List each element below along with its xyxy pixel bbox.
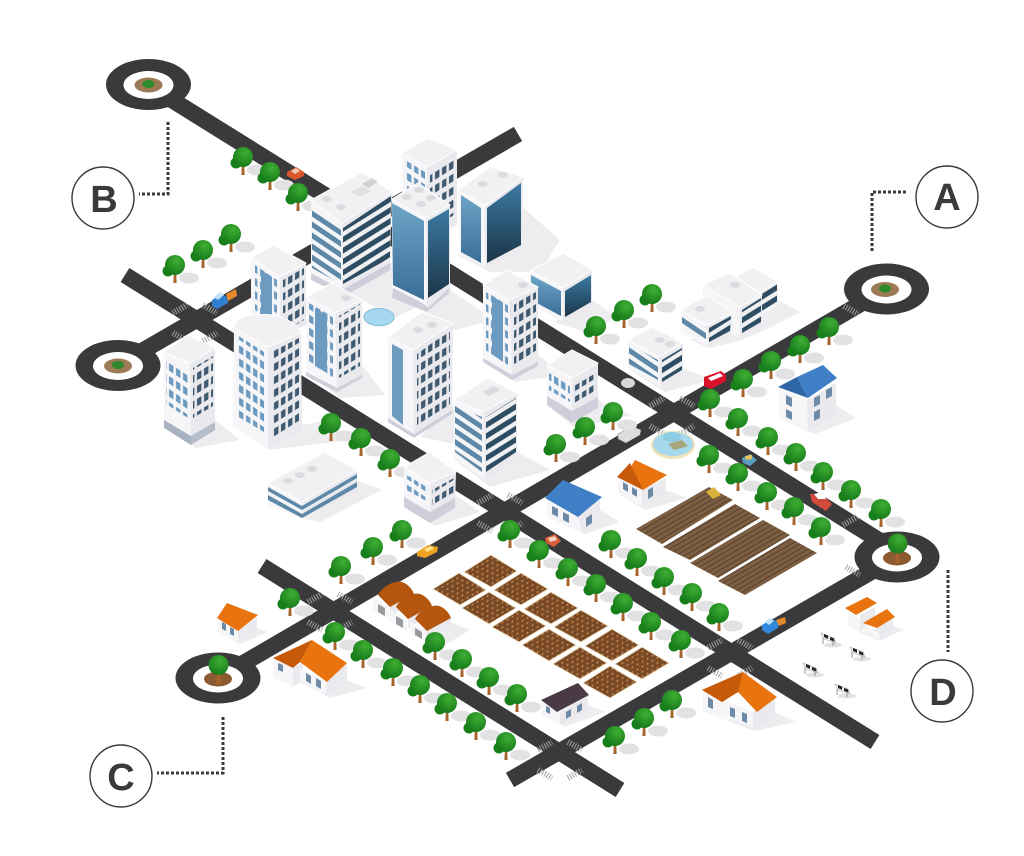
fountain	[651, 431, 695, 459]
building: white tower right	[483, 270, 538, 380]
farm sheds	[373, 582, 451, 641]
label B	[72, 167, 134, 229]
house: small blue roof	[545, 480, 602, 532]
building: striped tower front	[454, 378, 517, 480]
building: blue mid-rise	[530, 253, 592, 322]
roundabout tree C	[208, 655, 228, 684]
label A: A	[933, 177, 961, 219]
trees behind city	[162, 147, 322, 284]
label B: B	[90, 179, 118, 221]
house: orange cottage far left	[217, 603, 258, 642]
house: large orange lower left	[273, 640, 347, 696]
trees lower district	[278, 520, 743, 760]
roundabout A	[844, 264, 929, 314]
building: left white tower	[164, 335, 215, 445]
dotted leader lines	[139, 122, 948, 773]
building: large white curved-top tower	[233, 314, 302, 447]
ploughed field strips	[636, 487, 817, 595]
building cluster far right	[681, 267, 778, 346]
label D: D	[929, 672, 957, 714]
building: glass tower right	[458, 167, 523, 267]
roundabout B	[106, 59, 191, 110]
roundabout D	[854, 532, 940, 582]
roundabout tree D	[888, 534, 908, 563]
vehicles on upper roads	[618, 371, 832, 511]
road network	[118, 85, 897, 790]
building: back white tower	[402, 138, 457, 240]
building: white tower centre	[306, 283, 362, 392]
vehicles on lower roads	[417, 534, 786, 634]
small farm houses	[845, 597, 895, 640]
roundabout C	[176, 652, 260, 704]
car: orange on road B	[287, 167, 304, 180]
house: large blue roof	[778, 365, 837, 432]
cows	[803, 633, 871, 698]
house: dark roof	[541, 683, 589, 725]
building: right mid-rise with stripes	[628, 327, 683, 387]
house: large orange lower right	[702, 672, 777, 728]
building: striped office	[311, 172, 392, 296]
trees under city	[318, 284, 676, 478]
label C	[90, 745, 152, 807]
building: small white block lower	[404, 452, 456, 523]
roundabout left	[76, 340, 160, 391]
truck: blue on left road	[212, 289, 237, 309]
building: central glass tower	[392, 183, 450, 312]
label C: C	[107, 757, 135, 799]
crosswalks	[173, 305, 860, 778]
building: central white tower	[388, 312, 453, 438]
fountain pool	[363, 307, 395, 327]
building shadows	[170, 205, 903, 731]
house: orange roof	[617, 460, 667, 507]
trees along road A	[544, 317, 905, 546]
building: white tower upper left	[251, 245, 306, 338]
harvester	[706, 487, 721, 499]
building: small white block	[547, 350, 598, 423]
orchard plots	[433, 555, 669, 698]
label D	[911, 660, 973, 722]
label A	[916, 166, 978, 228]
building: flat low office	[268, 452, 357, 518]
